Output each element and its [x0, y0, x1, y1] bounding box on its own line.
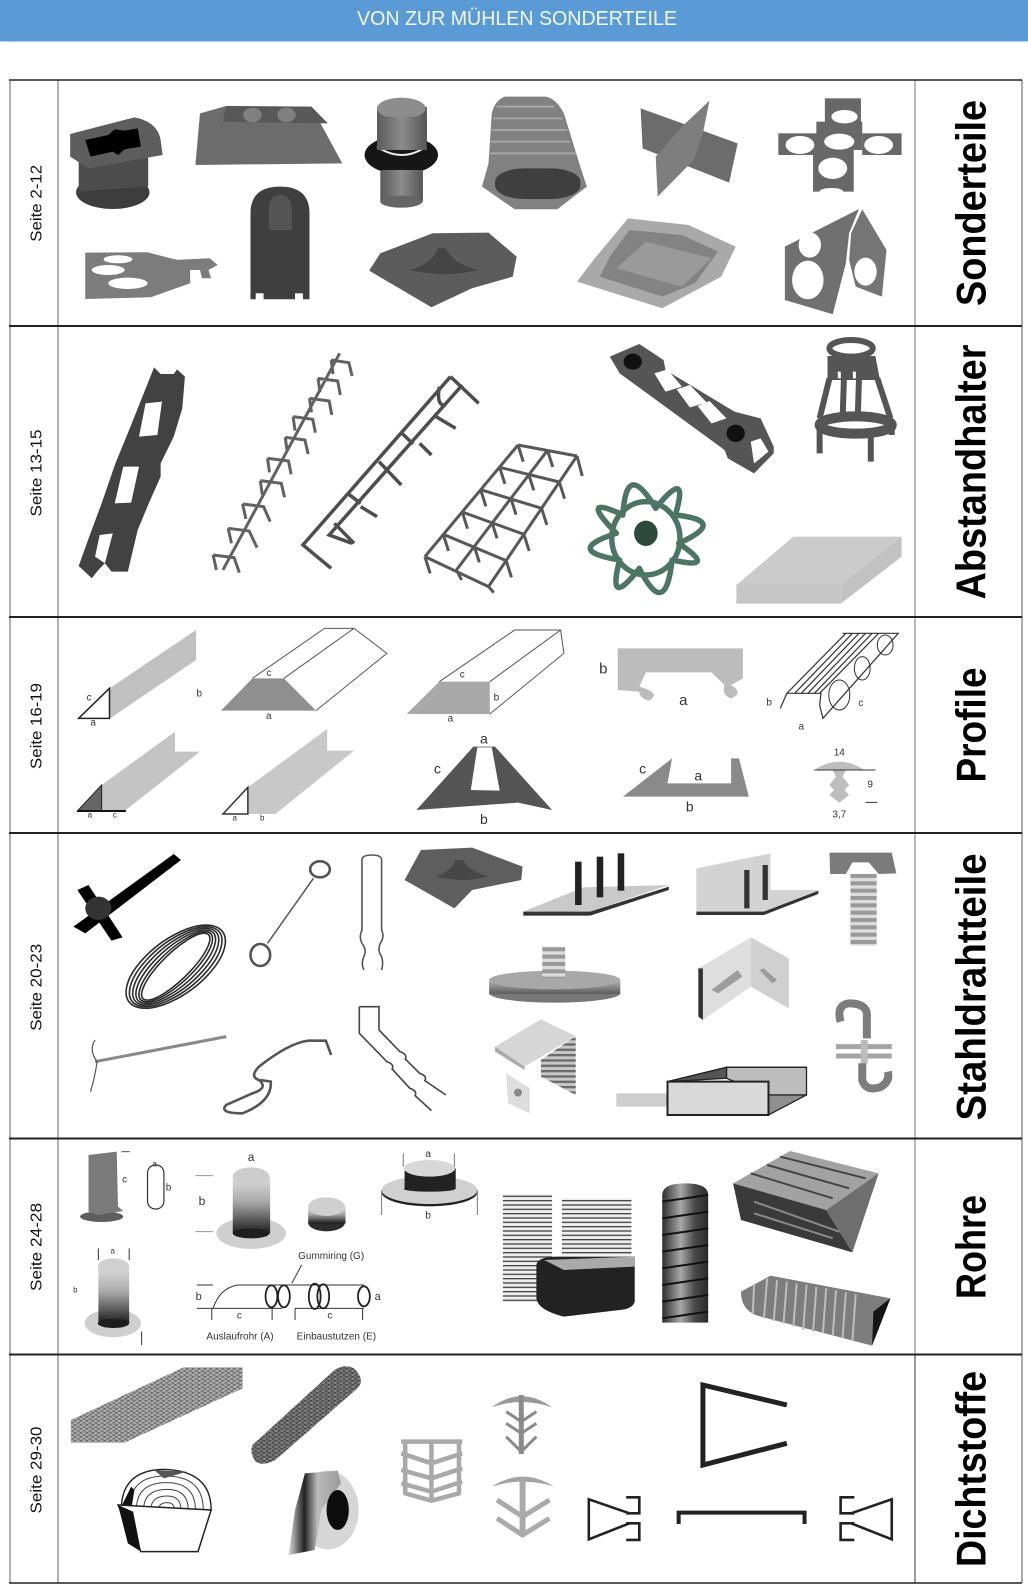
part: felt strip [71, 1367, 243, 1443]
profile: trapezoid with chamfered top [221, 628, 387, 722]
part: oval pipe with foot [80, 1152, 130, 1222]
profile: fir-tree clip with dimensions: 9 [867, 779, 873, 790]
part: hat flange: b [425, 1210, 431, 1221]
part: ladder spacer [303, 377, 479, 568]
panel: Profile [10, 617, 1022, 833]
part: perforated hood [785, 209, 887, 314]
profile: asymmetrical trapezoid: a [448, 713, 454, 724]
profile: hollow perforated strip: c [858, 698, 863, 709]
profile: asymmetrical trapezoid: c [460, 670, 465, 681]
part: ribbed panels and duct [503, 1194, 635, 1317]
category heading: Abstandhalter: Abstandhalter [948, 344, 995, 599]
part: flashing plate [369, 233, 517, 307]
profile: fir-tree clip with dimensions: 14 [834, 747, 845, 758]
diagram: Auslaufrohr and Einbaustutzen: b [196, 1291, 202, 1303]
part: black cross tie [73, 854, 181, 941]
part: flat bracket profile [679, 1513, 805, 1524]
diagram: oval section: a [153, 1160, 158, 1169]
part: wedge block [195, 106, 342, 165]
part: perforated plate [85, 252, 218, 299]
part: clip rail spacer [610, 344, 774, 473]
part: ribbed duct [482, 97, 587, 209]
profile: U channel wedge: a [694, 768, 702, 784]
category heading: Stahldrahtteile: Stahldrahtteile [948, 853, 995, 1120]
panel: Stahldrahtteile [10, 833, 1022, 1138]
diagram: Auslaufrohr and Einbaustutzen [196, 1251, 382, 1342]
page reference: Seite 2-12: Seite 2-12 [28, 165, 45, 242]
category heading: Sonderteile: Sonderteile [948, 100, 995, 306]
diagram: Auslaufrohr and Einbaustutzen: Gummiring (G) [298, 1251, 364, 1262]
part: threaded disc [489, 947, 620, 1003]
page reference: Seite 20-23: Seite 20-23 [28, 944, 45, 1031]
part: plate with three studs [523, 853, 669, 916]
part: U wire tie [360, 855, 383, 970]
part: round pipe on flange: b [199, 1194, 206, 1208]
profile: dark gasket triangle: b [480, 811, 488, 827]
part: tape roll [289, 1471, 359, 1555]
part: cone spacer [820, 340, 892, 462]
part: spiral corrugated tube [662, 1183, 708, 1323]
panel: Sonderteile [10, 80, 1022, 326]
part: flanged pipe with bolt holes [73, 1247, 142, 1345]
profile: fir-tree clip with dimensions [814, 747, 877, 820]
part: fir clip narrow [492, 1395, 552, 1454]
diagram: Auslaufrohr and Einbaustutzen: c [327, 1311, 332, 1322]
part: green star spacer [590, 485, 703, 593]
part: grey corner seal [401, 1442, 462, 1501]
part: slotted spacer bar [79, 367, 185, 578]
part: slotted angle bracket [698, 937, 789, 1020]
part: tall U clip [250, 187, 309, 300]
part: flanged pipe with bolt holes: b [73, 1286, 78, 1295]
part: ring rod anchor [250, 861, 330, 966]
profile: dark gasket triangle: c [434, 760, 441, 776]
diagram: oval section [148, 1160, 172, 1209]
part: round pipe on flange [195, 1150, 286, 1249]
part: spiked grid spacer [425, 445, 582, 593]
part: open corrugated duct [733, 1151, 879, 1252]
profile: L fillet with leg: c [113, 810, 117, 819]
profile: trapezoid with chamfered top: c [266, 668, 271, 679]
profile: triangular fillet: c [87, 693, 92, 704]
profile: L fillet outline: b [260, 814, 265, 823]
part: cross divider [641, 101, 738, 197]
profile: triangular fillet: b [197, 689, 203, 700]
profile: C channel: a [679, 692, 688, 709]
panel: Dichtstoffe [10, 1354, 1022, 1583]
part: pipe with flange [365, 98, 438, 208]
profile: hollow perforated strip: a [798, 721, 804, 732]
category heading: Dichtstoffe: Dichtstoffe [948, 1371, 995, 1567]
part: flanged pipe with bolt holes: a [111, 1247, 116, 1256]
profile: trapezoid with chamfered top: a [266, 711, 272, 722]
diagram: Auslaufrohr and Einbaustutzen: a [375, 1291, 382, 1303]
part: spike spacer [213, 353, 352, 573]
profile: C channel [599, 648, 743, 709]
profile: U channel wedge [623, 758, 749, 815]
part: hat flange: a [425, 1149, 431, 1160]
profile: triangular fillet [79, 630, 203, 728]
part: closed corrugated duct [741, 1276, 890, 1346]
title banner: VON ZUR MÜHLEN SONDERTEILE [357, 8, 677, 30]
part: wire coil [106, 918, 246, 1015]
part: bracket with plates [495, 1019, 576, 1113]
diagram: Auslaufrohr and Einbaustutzen: c [237, 1311, 242, 1322]
part: socket block [70, 117, 163, 209]
page reference: Seite 13-15: Seite 13-15 [28, 429, 45, 516]
profile: L fillet with leg: a [88, 810, 93, 819]
part: moulded tray [577, 218, 736, 308]
profile: triangular fillet: a [90, 717, 96, 728]
part: short cylinder [308, 1197, 346, 1231]
part: oval pipe with foot: c [122, 1174, 127, 1185]
part: perforated cross [778, 98, 902, 195]
profile: hollow perforated strip: b [766, 697, 772, 708]
part: hat flange [382, 1149, 477, 1221]
title banner [0, 0, 1028, 41]
part: round pipe on flange: a [248, 1150, 255, 1164]
diagram: Auslaufrohr and Einbaustutzen: Einbaustutzen (E) [297, 1331, 376, 1342]
part: slab [736, 537, 902, 604]
profile: asymmetrical trapezoid [407, 630, 564, 724]
profile: U channel wedge: c [639, 760, 646, 776]
part: large open trapezoid profile [703, 1385, 787, 1465]
diagram: oval section: b [166, 1182, 172, 1193]
page reference: Seite 16-19: Seite 16-19 [28, 683, 45, 769]
page reference: Seite 29-30: Seite 29-30 [28, 1426, 45, 1513]
part: small left seal profile [589, 1497, 639, 1540]
profile: C channel: b [599, 660, 607, 677]
part: threaded T bolt [829, 853, 896, 946]
part: open box sleeve [616, 1067, 807, 1115]
category heading: Profile: Profile [948, 667, 995, 782]
part: bent hook wire [224, 1041, 331, 1113]
profile: U channel wedge: b [686, 799, 694, 815]
profile: fir-tree clip with dimensions: 3,7 [832, 809, 847, 820]
part: roll in box [118, 1469, 211, 1552]
profile: L fillet outline [223, 729, 354, 823]
profile: dark gasket triangle [416, 730, 552, 827]
part: flashing plate [405, 848, 523, 908]
profile: L fillet outline: a [233, 814, 238, 823]
profile: dark gasket triangle: a [480, 730, 488, 746]
part: small right seal profile [841, 1497, 892, 1540]
part: fir clip wide [492, 1477, 554, 1535]
profile: hollow perforated strip [766, 633, 898, 732]
panel: Abstandhalter [10, 326, 1022, 617]
part: felt rod [251, 1366, 361, 1464]
panel: Rohre [10, 1138, 1022, 1354]
part: angle with two studs [696, 853, 818, 915]
part: double hook [836, 1003, 892, 1088]
profile: asymmetrical trapezoid: b [494, 693, 500, 704]
profile: L fillet with leg [77, 732, 200, 819]
category heading: Rohre: Rohre [948, 1195, 995, 1299]
part: straight tie wire [90, 1037, 226, 1092]
diagram: Auslaufrohr and Einbaustutzen: Auslaufrohr (A) [206, 1331, 274, 1342]
page reference: Seite 24-28: Seite 24-28 [28, 1203, 45, 1291]
part: long corrugated anchor [359, 1007, 446, 1111]
